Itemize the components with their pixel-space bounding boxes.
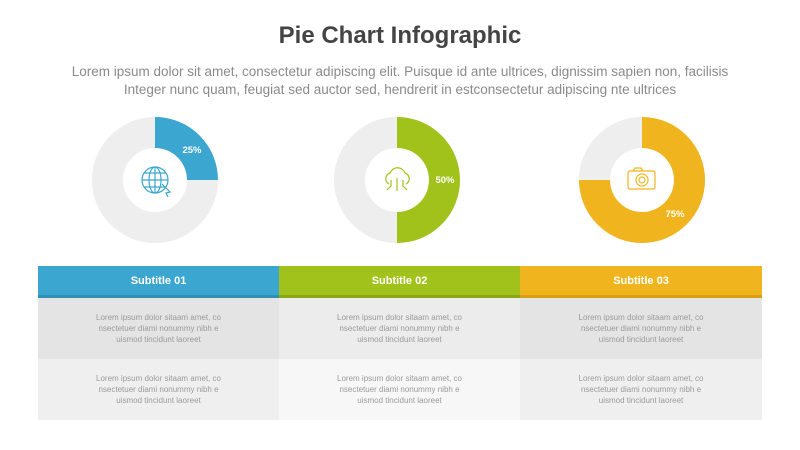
column 3: Lorem ipsum dolor sitaam amet, co [579, 374, 703, 383]
header 2: Subtitle 02 [372, 275, 427, 287]
column 3: Lorem ipsum dolor sitaam amet, co [579, 313, 703, 322]
column 2: nsectetuer diami nonummy nibh e [339, 385, 460, 394]
column 2: Lorem ipsum dolor sitaam amet, co [337, 374, 462, 383]
title: Pie Chart Infographic [279, 22, 521, 49]
column 3: uismod tincidunt laoreet [599, 396, 683, 405]
donut charts [92, 117, 705, 243]
donut 2: 50% [350, 117, 460, 243]
donut 1: 25%: 25% [182, 145, 202, 156]
column 3 [520, 266, 762, 420]
column 3: nsectetuer diami nonummy nibh e [581, 324, 701, 333]
column 1 [38, 266, 279, 420]
donut 3: 75%: 75% [665, 209, 685, 220]
column 2: uismod tincidunt laoreet [357, 396, 442, 405]
header 2 [279, 266, 520, 295]
column 2: Lorem ipsum dolor sitaam amet, co [337, 313, 462, 322]
donut 1: 25% [108, 117, 218, 228]
column 2: uismod tincidunt laoreet [357, 335, 442, 344]
column 1: nsectetuer diami nonummy nibh e [98, 385, 219, 394]
column 1: Lorem ipsum dolor sitaam amet, co [96, 313, 221, 322]
column 3: nsectetuer diami nonummy nibh e [581, 385, 701, 394]
column 3: uismod tincidunt laoreet [599, 335, 683, 344]
column 1: nsectetuer diami nonummy nibh e [98, 324, 219, 333]
header 3 [520, 266, 762, 295]
column 1: uismod tincidunt laoreet [116, 335, 201, 344]
header 1 [38, 266, 279, 295]
header 3: Subtitle 03 [613, 275, 669, 287]
column 1: Lorem ipsum dolor sitaam amet, co [96, 374, 221, 383]
subtitle text [72, 64, 728, 97]
column 2: nsectetuer diami nonummy nibh e [339, 324, 460, 333]
donut 3: 75% [579, 117, 705, 243]
column 2 [279, 266, 520, 405]
header 1: Subtitle 01 [131, 275, 186, 287]
subtitle text: Lorem ipsum dolor sit amet, consectetur adipiscing elit. Puisque id ante ultrices, dignissim sapien non, facilisis [72, 64, 728, 79]
column 1: uismod tincidunt laoreet [116, 396, 201, 405]
subtitle text: Integer nunc quam, feugiat sed auctor sed, hendrerit in estconsectetur adipiscing nte ultrices [124, 82, 676, 97]
donut 2: 50%: 50% [435, 175, 455, 186]
